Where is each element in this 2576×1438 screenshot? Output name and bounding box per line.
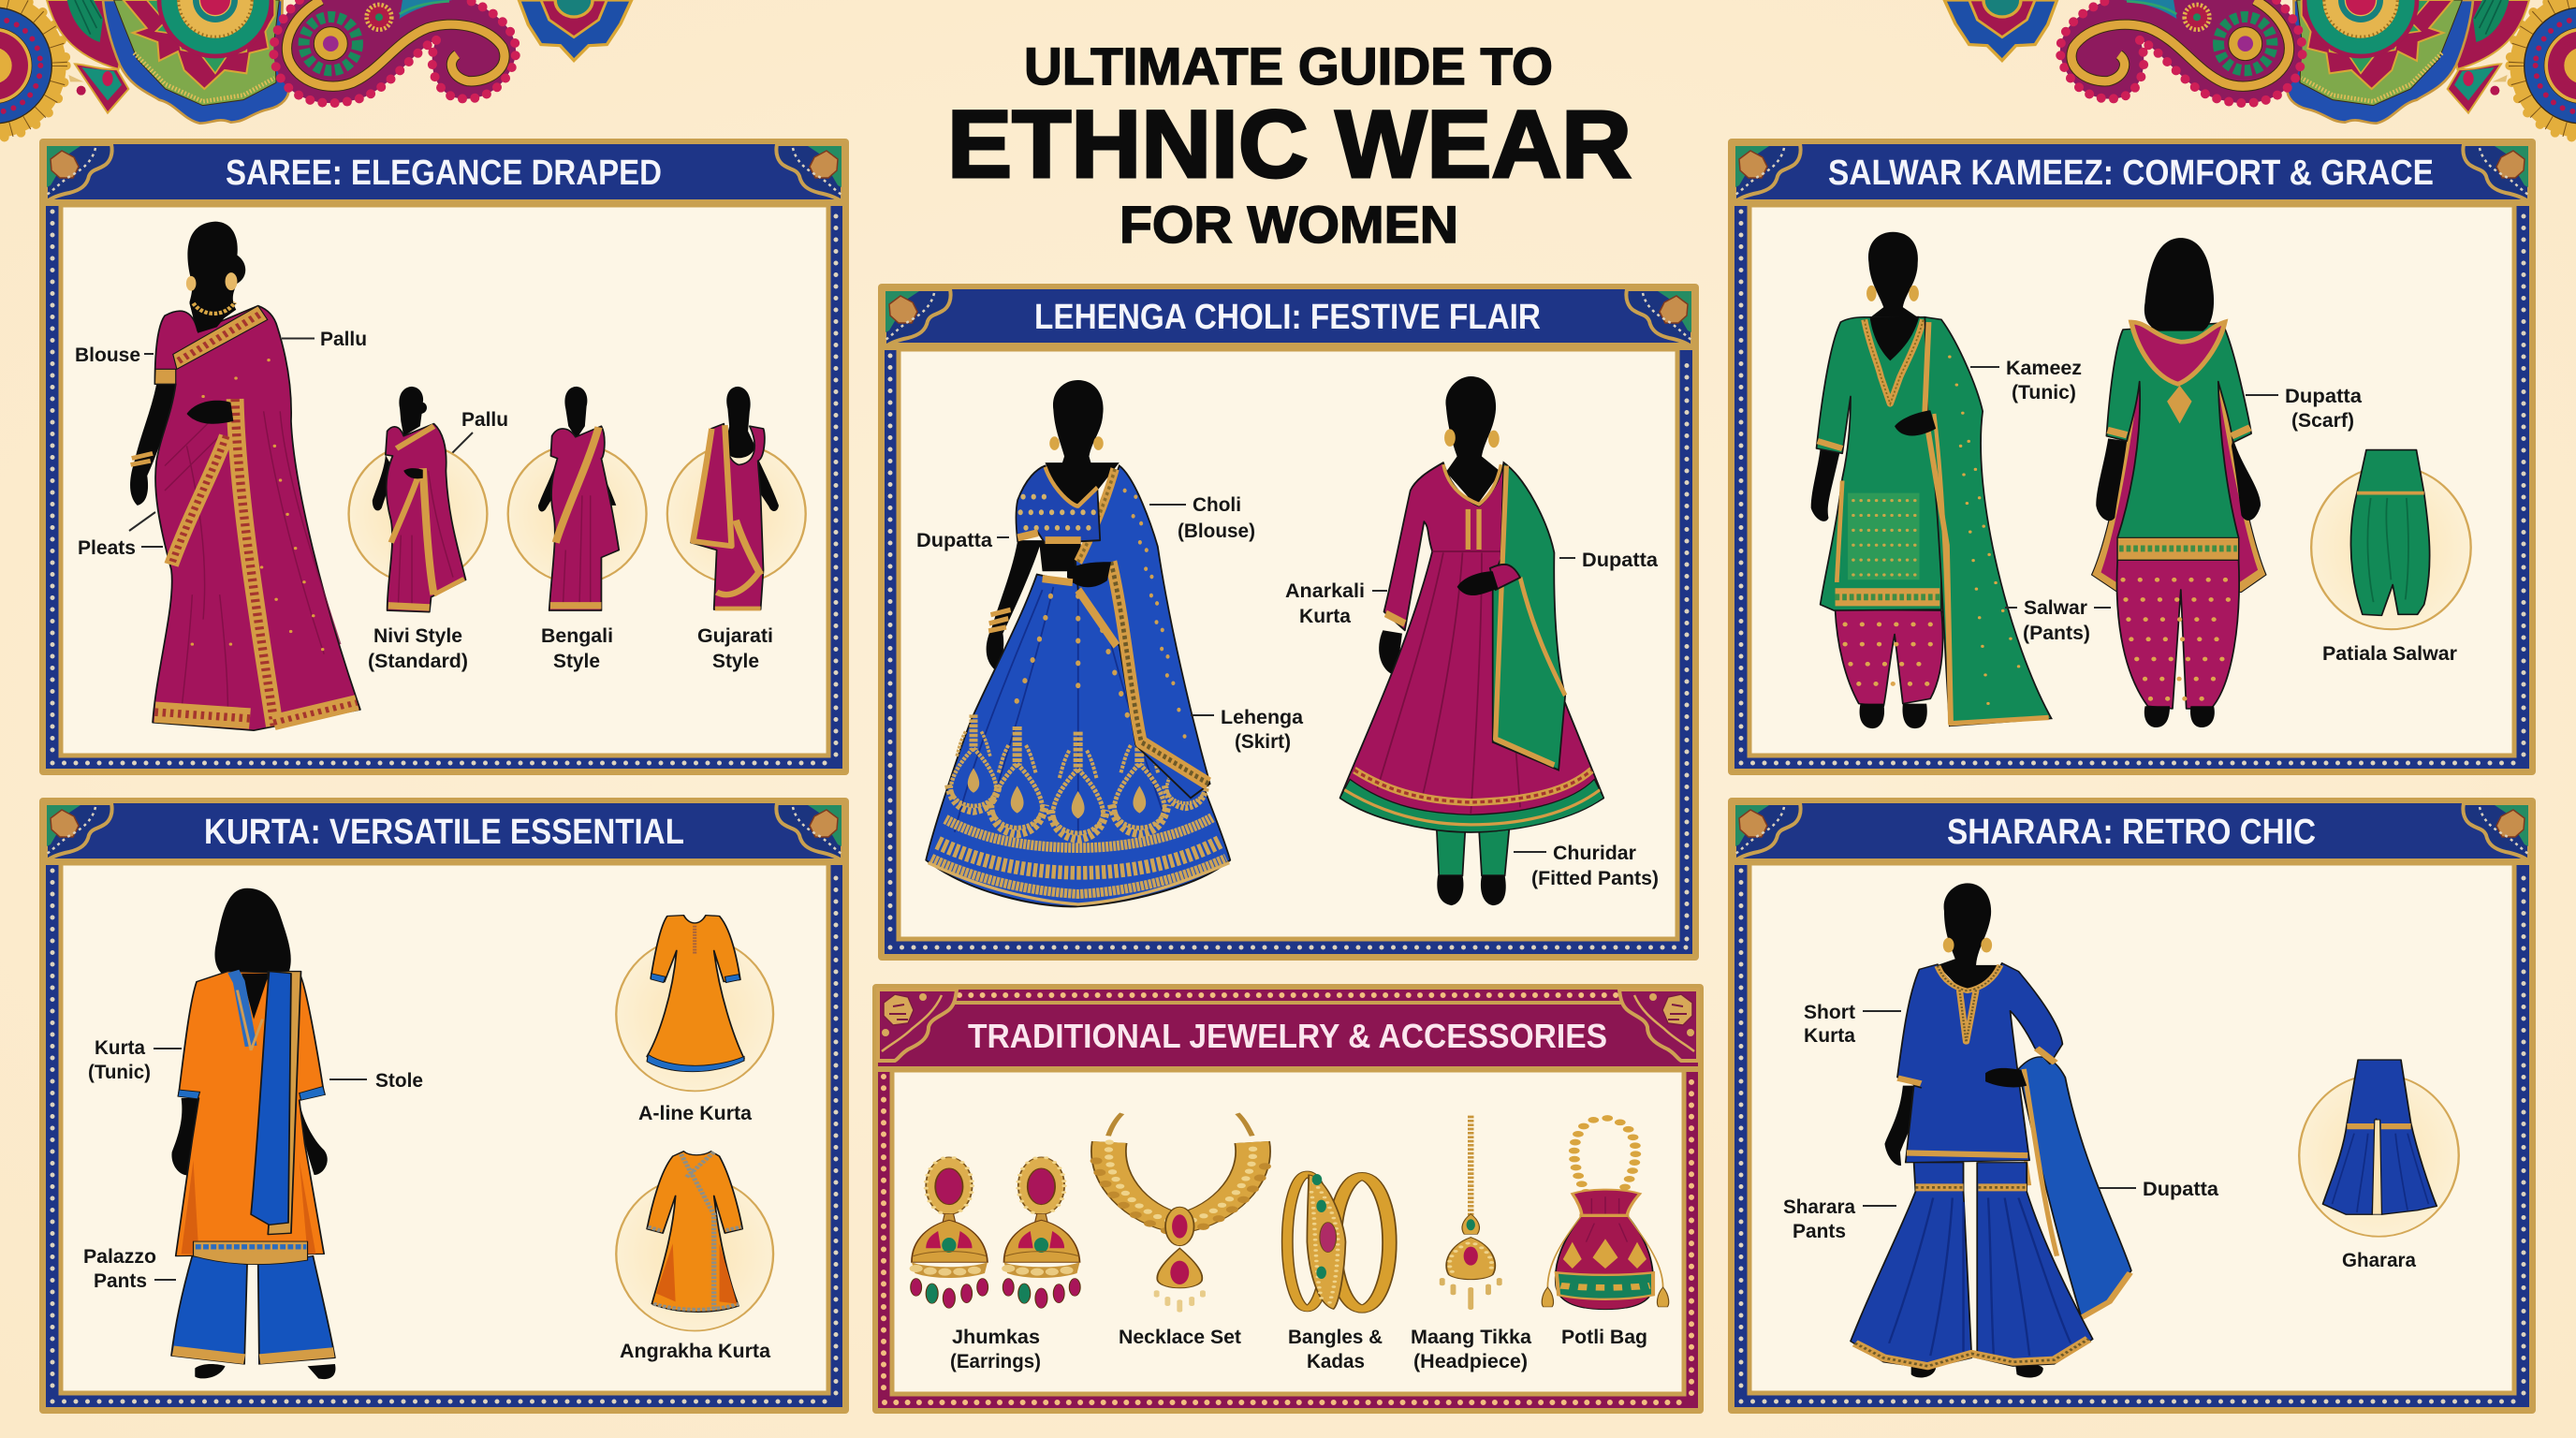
figure: gujarati style <box>691 387 779 609</box>
labels: lehenga: (Skirt) <box>1235 731 1291 753</box>
labels: sharara: Pants <box>1793 1221 1846 1242</box>
labels: salwar: Patiala Salwar <box>2322 643 2457 665</box>
labels: saree: Pallu <box>320 329 367 350</box>
labels: saree: Pallu <box>461 409 508 431</box>
labels: sharara: Gharara <box>2342 1250 2416 1271</box>
figure: angrakha kurta <box>647 1152 742 1312</box>
labels: kurta: Angrakha Kurta <box>620 1341 770 1362</box>
labels: saree: (Standard) <box>368 651 468 672</box>
labels: lehenga: Anarkali <box>1285 580 1365 602</box>
panel: salwar kameez <box>1728 139 2536 775</box>
labels: lehenga: Dupatta <box>1582 550 1658 571</box>
figure: a-line kurta <box>647 916 744 1072</box>
icon: maang tikka <box>1442 1116 1500 1308</box>
labels: jewelry: Necklace Set <box>1119 1327 1241 1348</box>
labels: kurta: Palazzo <box>83 1246 156 1268</box>
labels: saree: Nivi Style <box>373 625 462 647</box>
lines: sharara callouts <box>1863 1011 2136 1206</box>
figure: salwar front <box>1811 232 2052 728</box>
lines: saree callouts <box>129 339 473 547</box>
labels: salwar: Salwar <box>2024 597 2087 619</box>
heading: saree: SAREE: ELEGANCE DRAPED <box>226 154 662 193</box>
icon: necklace set <box>1096 1113 1266 1311</box>
figure: sharara outfit <box>1851 883 2131 1377</box>
labels: saree: Style <box>553 651 600 672</box>
figure: lehenga <box>926 380 1230 906</box>
heading: lehenga: LEHENGA CHOLI: FESTIVE FLAIR <box>1034 298 1541 337</box>
ornament: paisley corner top left <box>0 0 632 138</box>
labels: jewelry: Potli Bag <box>1561 1327 1647 1348</box>
title <box>947 37 1632 254</box>
figure: gharara <box>2299 1060 2459 1237</box>
labels: saree: Style <box>712 651 759 672</box>
labels: jewelry: Jhumkas <box>952 1327 1040 1348</box>
labels: kurta: Pants <box>94 1270 147 1292</box>
labels: kurta: A-line Kurta <box>638 1103 752 1124</box>
labels: lehenga: Churidar <box>1553 843 1636 864</box>
circles: drape styles <box>349 445 806 583</box>
icon: jhumka earrings <box>911 1157 1080 1308</box>
labels: kurta: (Tunic) <box>88 1062 151 1083</box>
labels: lehenga: (Blouse) <box>1178 521 1255 542</box>
panel: jewelry and accessories <box>872 984 1704 1414</box>
lines: kurta callouts <box>154 1049 367 1280</box>
labels: lehenga: Choli <box>1193 494 1241 516</box>
labels: jewelry: Kadas <box>1307 1351 1365 1372</box>
figure: kurta with palazzo <box>171 888 335 1379</box>
panel: kurta <box>39 798 849 1414</box>
labels: jewelry: (Headpiece) <box>1413 1351 1528 1372</box>
labels: salwar: Kameez <box>2006 358 2082 379</box>
icon: bangles and kadas <box>1287 1174 1389 1309</box>
title: ETHNIC WEAR <box>947 91 1632 198</box>
figure: bengali style <box>538 387 619 610</box>
labels: kurta <box>83 1037 770 1362</box>
labels: saree: Bengali <box>541 625 613 647</box>
labels: saree <box>75 329 773 672</box>
labels: jewelry <box>950 1327 1647 1372</box>
labels: sharara: Short <box>1804 1002 1855 1023</box>
labels: lehenga: (Fitted Pants) <box>1531 868 1659 889</box>
labels: sharara <box>1783 1002 2416 1271</box>
labels: jewelry: Bangles & <box>1288 1327 1383 1348</box>
figure: salwar back <box>2092 238 2266 727</box>
lines: salwar callouts <box>1970 367 2278 608</box>
figure: anarkali <box>1340 376 1603 905</box>
heading: salwar: SALWAR KAMEEZ: COMFORT & GRACE <box>1828 154 2434 193</box>
labels: saree: Blouse <box>75 345 140 366</box>
labels: sharara: Kurta <box>1804 1025 1855 1047</box>
panel: sharara <box>1728 798 2536 1414</box>
circles: kurta variants <box>616 937 773 1331</box>
labels: salwar <box>2006 358 2457 665</box>
labels: sharara: Sharara <box>1783 1196 1855 1218</box>
ornament: paisley corner top right <box>1944 0 2576 138</box>
figure: patiala salwar <box>2311 450 2471 629</box>
figure: nivi style <box>373 387 466 612</box>
heading: kurta: KURTA: VERSATILE ESSENTIAL <box>204 813 684 852</box>
lines: lehenga callouts <box>997 505 1575 852</box>
labels: saree: Gujarati <box>697 625 773 647</box>
panel: saree <box>39 139 849 775</box>
labels: salwar: (Tunic) <box>2012 382 2076 404</box>
labels: kurta: Stole <box>375 1070 423 1092</box>
labels: jewelry: Maang Tikka <box>1411 1327 1531 1348</box>
title: FOR WOMEN <box>1120 195 1458 254</box>
labels: salwar: (Scarf) <box>2291 410 2354 432</box>
labels: kurta: Kurta <box>95 1037 145 1059</box>
title: ULTIMATE GUIDE TO <box>1024 37 1553 95</box>
panel: lehenga choli <box>878 284 1699 961</box>
heading: jewelry: TRADITIONAL JEWELRY & ACCESSORIES <box>968 1017 1607 1055</box>
heading: sharara: SHARARA: RETRO CHIC <box>1947 813 2316 852</box>
labels: salwar: (Pants) <box>2023 623 2090 644</box>
labels: lehenga <box>916 494 1659 889</box>
labels: saree: Pleats <box>78 537 136 559</box>
labels: lehenga: Lehenga <box>1221 707 1303 728</box>
icon: potli bag <box>1542 1118 1669 1310</box>
labels: sharara: Dupatta <box>2143 1179 2218 1200</box>
labels: salwar: Dupatta <box>2285 386 2362 407</box>
labels: jewelry: (Earrings) <box>950 1351 1041 1372</box>
figure: main saree <box>130 222 360 730</box>
labels: lehenga: Kurta <box>1299 606 1351 627</box>
labels: lehenga: Dupatta <box>916 530 992 551</box>
